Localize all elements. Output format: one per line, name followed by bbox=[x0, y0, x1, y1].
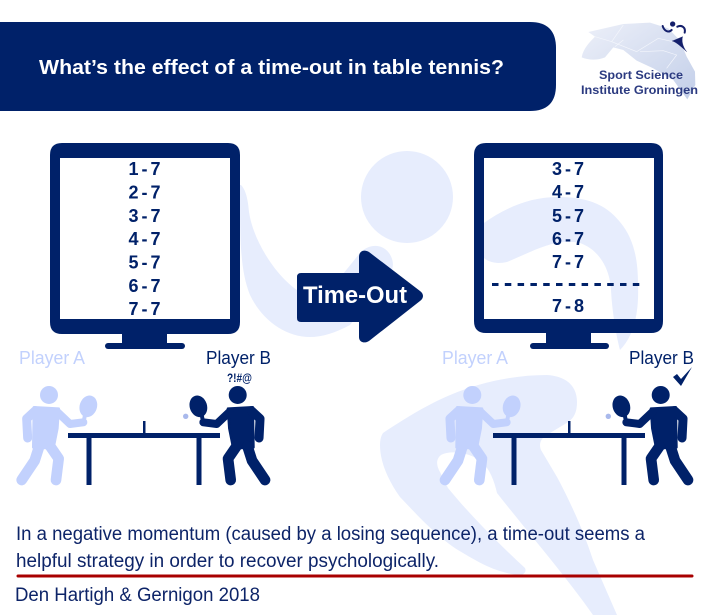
right scores: 4 - 7 bbox=[552, 182, 584, 202]
table bbox=[493, 421, 645, 485]
left scores: 4 - 7 bbox=[128, 229, 161, 249]
left scoreboard monitor bbox=[50, 143, 240, 349]
right scores bbox=[552, 159, 584, 316]
left scores: 3 - 7 bbox=[128, 206, 161, 226]
left scores: 6 - 7 bbox=[128, 276, 161, 296]
player A figure bbox=[22, 386, 100, 480]
left table tennis scene bbox=[22, 386, 265, 485]
conclusion text: In a negative momentum (caused by a losing sequence), a time-out seems a bbox=[16, 524, 645, 545]
logo runner bbox=[663, 21, 687, 52]
ball bbox=[183, 414, 188, 419]
logo text line 2: Institute Groningen bbox=[581, 83, 698, 97]
player B figure bbox=[187, 386, 265, 480]
player A figure bbox=[445, 386, 523, 480]
left player labels: Player A bbox=[19, 348, 85, 368]
ball bbox=[606, 414, 611, 419]
logo map bbox=[582, 21, 695, 99]
right player labels: Player B bbox=[629, 348, 694, 368]
time-out arrow bbox=[297, 251, 423, 342]
background runner watermark bbox=[240, 151, 638, 615]
arrow label: Time-Out bbox=[303, 282, 407, 309]
left player labels: ?!#@ bbox=[227, 373, 252, 385]
left scores: 5 - 7 bbox=[128, 252, 161, 272]
right player labels: Player A bbox=[442, 348, 508, 368]
left scores: 7 - 7 bbox=[128, 299, 161, 319]
left player labels bbox=[19, 348, 271, 385]
right player labels bbox=[442, 348, 694, 368]
right scores: 6 - 7 bbox=[552, 229, 584, 249]
left player labels: Player B bbox=[206, 348, 271, 368]
title banner bbox=[0, 22, 556, 111]
left scores bbox=[128, 159, 161, 319]
icon: check mark bbox=[673, 367, 692, 386]
logo text line 1: Sport Science bbox=[599, 68, 683, 82]
right scores: 7 - 7 bbox=[552, 252, 584, 272]
right scores: 5 - 7 bbox=[552, 206, 584, 226]
conclusion text bbox=[16, 524, 645, 572]
right scoreboard monitor bbox=[474, 143, 663, 349]
conclusion text: helpful strategy in order to recover psychologically. bbox=[16, 551, 439, 572]
left scores: 2 - 7 bbox=[128, 182, 161, 202]
right scores: 3 - 7 bbox=[552, 159, 584, 179]
left scores: 1 - 7 bbox=[128, 159, 161, 179]
title: What’s the effect of a time-out in table tennis? bbox=[39, 56, 504, 79]
right scores: 7 - 8 bbox=[552, 296, 584, 316]
citation: Den Hartigh & Gernigon 2018 bbox=[15, 585, 260, 606]
logo: Sport Science Institute Groningen bbox=[581, 21, 698, 99]
player B figure bbox=[610, 386, 688, 480]
right table tennis scene bbox=[445, 386, 688, 485]
red divider line bbox=[18, 574, 692, 578]
table bbox=[68, 421, 220, 485]
